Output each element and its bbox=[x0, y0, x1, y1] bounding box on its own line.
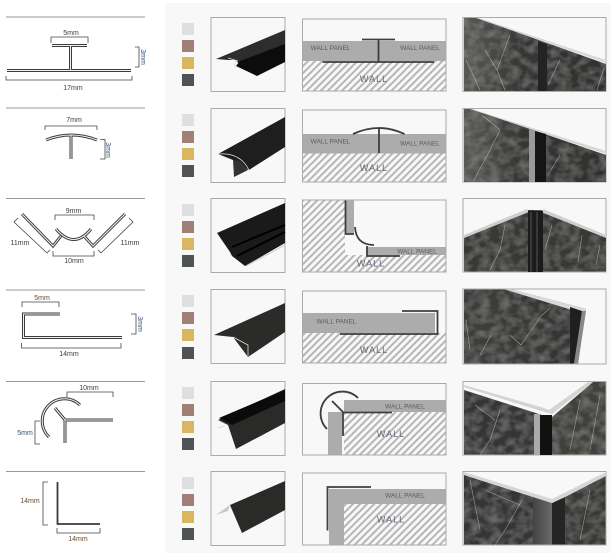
row 4 dimension drawing: 14mm bbox=[59, 351, 79, 358]
cross-section row 4: WALL PANEL bbox=[317, 318, 357, 326]
row 3 dimension drawing: 11mm bbox=[121, 240, 140, 247]
row 5 dimension drawing: 10mm bbox=[79, 385, 99, 392]
cross-section row 3 bbox=[302, 200, 446, 272]
product image row 4 bbox=[211, 290, 285, 364]
cross-section row 5 bbox=[302, 384, 446, 455]
product image row 2 bbox=[211, 108, 285, 182]
colour swatches row 6 bbox=[182, 477, 194, 540]
row 2 dimension drawing bbox=[6, 108, 145, 159]
colour swatches row 5 bbox=[182, 387, 194, 450]
installed photo row 3 bbox=[463, 198, 606, 272]
cross-section row 6: WALL bbox=[377, 514, 405, 524]
cross-section row 2 bbox=[302, 110, 446, 182]
row 6 dimension drawing: 14mm bbox=[20, 498, 40, 505]
row 3 dimension drawing: 11mm bbox=[11, 240, 30, 247]
cross-section row 6: WALL PANEL bbox=[385, 492, 425, 500]
product image row 1 bbox=[211, 18, 285, 92]
row 5 dimension drawing: 5mm bbox=[17, 430, 33, 437]
installed photo row 2 bbox=[463, 108, 606, 182]
product image row 6 bbox=[211, 472, 285, 546]
cross-section row 4: WALL bbox=[360, 345, 388, 355]
cross-section row 6 bbox=[302, 473, 446, 545]
cross-section row 2: WALL PANEL bbox=[400, 140, 440, 148]
row 4 dimension drawing bbox=[6, 290, 145, 358]
cross-section row 3: WALL bbox=[357, 258, 385, 268]
row 4 dimension drawing: 3mm bbox=[136, 316, 143, 332]
installed photo row 6 bbox=[463, 472, 606, 545]
row 1 dimension drawing bbox=[6, 17, 146, 92]
cross-section row 1: WALL PANEL bbox=[311, 45, 351, 52]
colour swatches row 2 bbox=[182, 114, 194, 177]
cross-section row 5: WALL PANEL bbox=[385, 404, 425, 410]
cross-section row 1: WALL bbox=[360, 74, 388, 84]
cross-section row 2: WALL PANEL bbox=[311, 138, 351, 146]
installed photo row 4 bbox=[463, 289, 606, 364]
row 1 dimension drawing: 3mm bbox=[139, 49, 146, 65]
row 6 dimension drawing: 14mm bbox=[68, 536, 88, 543]
row 1 dimension drawing: 17mm bbox=[63, 85, 83, 92]
row 1 dimension drawing: 5mm bbox=[63, 30, 79, 37]
cross-section row 3: WALL PANEL bbox=[397, 248, 437, 256]
row 2 dimension drawing: 3mm bbox=[104, 142, 111, 158]
row 4 dimension drawing: 5mm bbox=[34, 295, 50, 302]
row 3 dimension drawing bbox=[6, 198, 145, 265]
product image row 5 bbox=[211, 382, 285, 456]
colour swatches row 1 bbox=[182, 23, 194, 86]
cross-section row 5: WALL bbox=[377, 429, 405, 439]
background panel bbox=[165, 3, 611, 553]
installed photo row 5 bbox=[463, 382, 606, 455]
colour swatches row 4 bbox=[182, 295, 194, 359]
cross-section row 4 bbox=[302, 291, 446, 363]
product image row 3 bbox=[211, 198, 285, 272]
colour swatches row 3 bbox=[182, 204, 194, 267]
row 6 dimension drawing bbox=[6, 472, 145, 543]
row 3 dimension drawing: 9mm bbox=[66, 208, 81, 215]
row 5 dimension drawing bbox=[6, 382, 145, 444]
cross-section row 1 bbox=[302, 19, 446, 91]
cross-section row 2: WALL bbox=[360, 163, 388, 173]
cross-section row 1: WALL PANEL bbox=[400, 45, 440, 52]
row 2 dimension drawing: 7mm bbox=[66, 117, 82, 124]
row 3 dimension drawing: 10mm bbox=[64, 258, 84, 265]
installed photo row 1 bbox=[463, 18, 606, 92]
